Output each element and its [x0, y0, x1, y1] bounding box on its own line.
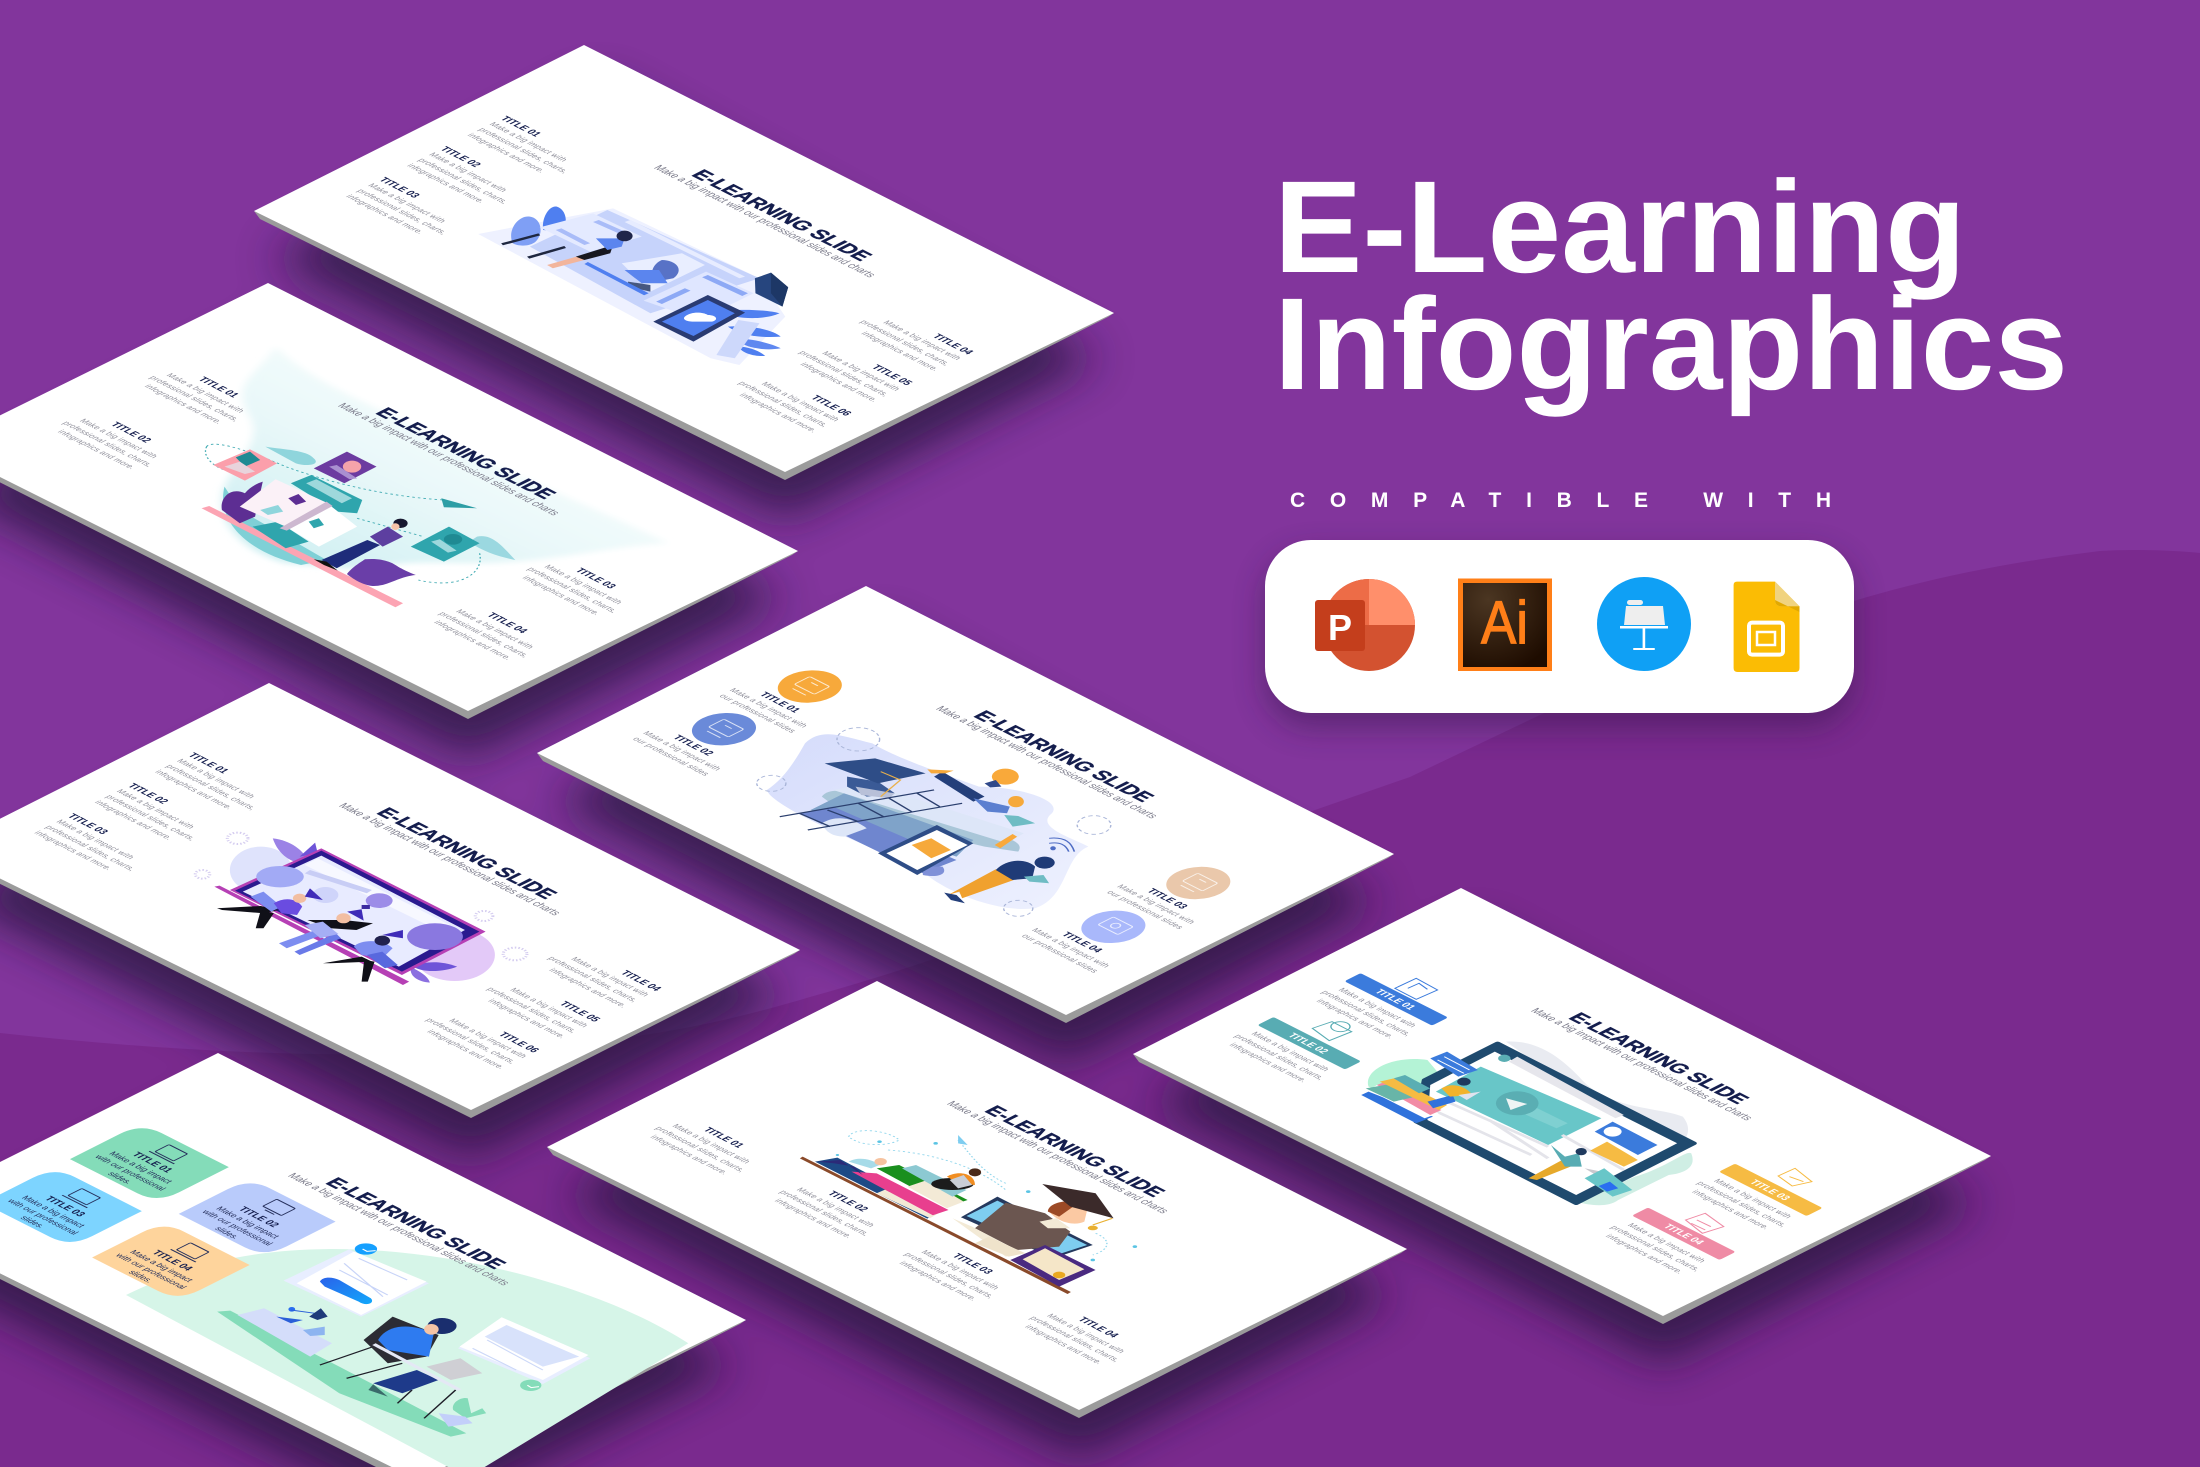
slide 5 text and leaf cards: Make a big impact [214, 1205, 283, 1240]
slide 4 text: TITLE 05 [556, 1000, 602, 1024]
slide 7 text and title bars: E-LEARNING SLIDE [1563, 1010, 1754, 1107]
slide 2 text [48, 330, 707, 664]
slide 2 text: infographics and more. [55, 429, 138, 471]
slide 7 text and title bars: Make a big impact with [1249, 1031, 1332, 1073]
slide 4 text: infographics and more. [425, 1029, 507, 1070]
main title: E-Learning [1274, 153, 1966, 300]
slide 3 text and icon circles: E-LEARNING SLIDE [968, 708, 1159, 805]
slide 6 text: Make a big impact with [670, 1123, 753, 1165]
slide 1 text [344, 91, 1023, 434]
slide 4 text: professional slides, charts, [546, 955, 640, 1003]
slide 7 text and title bars: professional slides, charts, [1608, 1224, 1703, 1272]
slide 2 text: Make a big impact with [454, 608, 536, 650]
slide 1 text: Make a big impact with [366, 182, 448, 224]
slide 7 text and title bars: Make a big impact with our professional slides and charts [1527, 1007, 1756, 1122]
slide 1 text: infographics and more. [405, 163, 487, 204]
slide 3 text and icon circles: Make a big impact with [1030, 927, 1112, 969]
slide 4 text: infographics and more. [32, 830, 115, 872]
slide 5 text and leaf cards: Make a big impact [107, 1150, 176, 1185]
slide 6 text: E-LEARNING SLIDE [979, 1103, 1170, 1200]
illustration: graduate with books and diploma [800, 1131, 1137, 1294]
slide 4 text: Make a big impact with [508, 987, 590, 1029]
slide 5 text and leaf cards: with our professional [92, 1153, 169, 1192]
slide 2 text: professional slides, charts, [437, 611, 531, 659]
slide 7 text and title bars: TITLE 04 [1660, 1223, 1706, 1246]
slide 1 text: TITLE 03 [376, 176, 422, 200]
slide 5 text and leaf cards: slides. [126, 1269, 156, 1284]
slide 1 text: infographics and more. [737, 392, 820, 434]
slide 4 text: TITLE 03 [64, 813, 110, 836]
slide 6 text: professional slides, charts, [1028, 1315, 1122, 1363]
main title: Infographics [1274, 270, 2068, 417]
slide 1: blue e-learning [254, 45, 1114, 480]
slide 5 text and leaf cards: Make a big impact [127, 1249, 196, 1283]
slide 5: green desk worker [0, 1053, 746, 1467]
slide 3 text and icon circles: TITLE 01 [756, 691, 803, 714]
slide 1 text: Make a big impact with [487, 121, 570, 163]
slide 1 text: TITLE 01 [497, 115, 543, 139]
slide 1 text: professional slides, charts, [736, 380, 831, 428]
slide 3 text and icon circles: Make a big impact with [1115, 883, 1198, 925]
slide 3 text and icon circles: TITLE 04 [1058, 931, 1105, 954]
slide 7 text and title bars: infographics and more. [1603, 1233, 1686, 1275]
slide 4 text: TITLE 01 [185, 752, 231, 775]
slide 5 text and leaf cards: slides. [212, 1225, 242, 1240]
slide 1 text: infographics and more. [465, 132, 548, 174]
slide 6 text: TITLE 02 [824, 1190, 871, 1213]
icon: Adobe Illustrator [1458, 578, 1552, 671]
slide 4 text: TITLE 02 [124, 782, 171, 806]
slide 7 text and title bars: TITLE 01 [1371, 988, 1418, 1012]
slide 7 text and title bars: Make a big impact with [1336, 987, 1419, 1029]
slide 4 text: Make a big impact with [569, 956, 652, 998]
slide 5 text and leaf cards: TITLE 03 [41, 1195, 88, 1219]
illustration: students on monitor [195, 833, 527, 985]
slide 4 text: professional slides, charts, [43, 824, 138, 872]
slide 4 text [32, 729, 708, 1071]
slide 1 text: Make a big impact with [427, 151, 510, 193]
slide 4 text: professional slides, charts, [164, 763, 258, 811]
slide 1 text: professional slides, charts, [416, 157, 511, 205]
icon: Keynote [1597, 577, 1691, 671]
slide 4 text: Make a big impact with our professional slides and charts [335, 802, 564, 917]
slide 6 text: TITLE 03 [949, 1252, 995, 1276]
slide 4 text: professional slides, charts, [424, 1017, 518, 1065]
slide 4: virtual classroom [0, 683, 800, 1118]
slide 2 text: Make a big impact with [542, 564, 625, 606]
slide 6 text: Make a big impact with [1045, 1313, 1127, 1355]
slide 1 text: TITLE 04 [929, 333, 976, 356]
slide 7 text and title bars: professional slides, charts, [1232, 1033, 1327, 1081]
slide 6 text [641, 1029, 1314, 1369]
slide 4 text: TITLE 06 [495, 1031, 541, 1054]
slide 3 text and icon circles: TITLE 02 [670, 734, 716, 757]
slide 5 text and leaf cards: with our professional [199, 1208, 276, 1247]
slide 2 text: TITLE 01 [195, 376, 241, 399]
slide 6 text: Make a big impact with [919, 1249, 1002, 1291]
illustration: graduation cap and books [757, 728, 1111, 916]
slide 5 text and leaf cards: E-LEARNING SLIDE [320, 1175, 511, 1272]
slide 6 text: professional slides, charts, [902, 1251, 997, 1299]
slide 1 text: infographics and more. [798, 361, 880, 403]
slide 5 text and leaf cards: Make a big impact [19, 1194, 88, 1229]
slide 4 text: professional slides, charts, [103, 794, 198, 842]
slide 5 text and leaf cards: Make a big impact with our professional slides and charts [284, 1172, 513, 1287]
slide 2 text: infographics and more. [520, 575, 603, 617]
icon: Adobe Illustrator: Ai [1481, 589, 1528, 656]
slide 3 text and icon circles: TITLE 03 [1144, 887, 1190, 911]
slide 3 text and icon circles: our professional slides [1104, 889, 1186, 930]
slide 6 text: infographics and more. [772, 1198, 855, 1239]
slide 3 text and icon circles: Make a big impact with our professional slides and charts [932, 705, 1161, 820]
main title [1274, 153, 2068, 417]
slide 2 text: Make a big impact with [77, 418, 160, 460]
slide 3 text and icon circles: our professional slides [1019, 933, 1100, 974]
slide 5 text and leaf cards [0, 1099, 532, 1376]
slide 2 text: professional slides, charts, [525, 566, 620, 614]
slide 1 text: professional slides, charts, [797, 350, 891, 398]
illustration: student at desk [126, 1243, 688, 1467]
slide 7 text and title bars: infographics and more. [1314, 998, 1397, 1040]
slide 2 text: professional slides, charts, [60, 420, 155, 468]
slide 7 text and title bars: infographics and more. [1690, 1189, 1772, 1231]
slide 6 text: Make a big impact with [794, 1187, 877, 1228]
slide 2 text: professional slides, charts, [147, 375, 242, 423]
slide 3: graduation cap [537, 586, 1394, 1023]
slide 3 text and icon circles: Make a big impact with [727, 687, 810, 729]
slide 3 text and icon circles [630, 633, 1304, 975]
slide 7 text and title bars: infographics and more. [1227, 1042, 1310, 1084]
slide 5 text and leaf cards: TITLE 02 [235, 1206, 281, 1229]
slide 1 text: infographics and more. [344, 193, 426, 235]
slide 6: graduate and books [547, 981, 1407, 1418]
slide 3 text and icon circles: Make a big impact with [641, 730, 723, 772]
slide 3 text and icon circles: our professional slides [630, 736, 712, 777]
icon: PowerPoint: P [1328, 607, 1352, 648]
slide 1 text: Make a big impact with [820, 350, 903, 392]
slide 4 text: infographics and more. [153, 769, 235, 811]
slide 2 text: Make a big impact with [164, 372, 247, 414]
slide 2 text: TITLE 04 [484, 612, 530, 635]
compatible with label: COMPATIBLE WITH [1290, 489, 1831, 512]
slide 5 text and leaf cards: TITLE 04 [149, 1249, 195, 1273]
slide 4 text: infographics and more. [547, 967, 629, 1009]
slide 7 text and title bars: professional slides, charts, [1695, 1180, 1789, 1228]
slide 5 text and leaf cards: slides. [105, 1170, 135, 1185]
slide 7 text and title bars [1220, 935, 1898, 1278]
slide 4 text: Make a big impact with [447, 1018, 529, 1059]
slide 5 text and leaf cards: slides. [18, 1214, 48, 1229]
slide 4 text: TITLE 04 [617, 969, 664, 993]
illustration: tablet with video lesson [1312, 978, 1812, 1233]
slide 3 text and icon circles: our professional slides [717, 693, 798, 734]
slide 2 text: infographics and more. [142, 383, 225, 425]
slide 6 text: infographics and more. [1023, 1324, 1105, 1366]
slide 4 text: professional slides, charts, [485, 986, 579, 1034]
slide 5 text and leaf cards: with our professional [113, 1251, 189, 1290]
slide 7 text and title bars: Make a big impact with [1712, 1178, 1794, 1220]
slide 2: teal book [0, 283, 798, 719]
slide 1 text: Make a big impact with [881, 319, 964, 361]
slide 1 text: infographics and more. [859, 331, 941, 372]
slide 4 text: Make a big impact with [114, 788, 197, 830]
slide 1 text: professional slides, charts, [355, 188, 449, 236]
slide 4 text: infographics and more. [486, 998, 568, 1040]
icon: PowerPoint [1315, 579, 1415, 671]
slide 1 text: professional slides, charts, [476, 127, 571, 175]
slide 1 text: professional slides, charts, [858, 319, 952, 367]
slide 2 text: TITLE 03 [572, 567, 618, 590]
slide 1 text: TITLE 02 [437, 145, 483, 169]
slide 4 text: infographics and more. [92, 799, 175, 841]
slide 7 text and title bars: Make a big impact with [1625, 1222, 1708, 1264]
slide 7 text and title bars: TITLE 03 [1746, 1179, 1793, 1202]
slide 6 text: infographics and more. [648, 1134, 731, 1176]
illustration: open book and student [202, 347, 668, 607]
slide 6 text: Make a big impact with our professional slides and charts [943, 1100, 1172, 1215]
slide 2 text: Make a big impact with our professional slides and charts [334, 402, 563, 517]
slide 1 text: TITLE 05 [868, 364, 915, 387]
compatibility panel [1265, 540, 1854, 727]
slide 7 text and title bars: professional slides, charts, [1319, 989, 1414, 1037]
slide 1 text: Make a big impact with [759, 381, 842, 423]
slide 6 text: professional slides, charts, [777, 1189, 872, 1237]
slide 2 text: E-LEARNING SLIDE [370, 405, 561, 502]
slide 1 text: TITLE 06 [807, 394, 854, 418]
slide 1 text: E-LEARNING SLIDE [686, 167, 877, 264]
slide 7: tablet video [1133, 888, 1991, 1324]
slide 4 text: Make a big impact with [54, 819, 137, 861]
slide 6 text: infographics and more. [897, 1260, 980, 1302]
slide 4 text: Make a big impact with [175, 758, 257, 800]
slide 1 text: Make a big impact with our professional slides and charts [650, 164, 879, 279]
slide 6 text: professional slides, charts, [653, 1125, 748, 1173]
slide 4 text: E-LEARNING SLIDE [371, 805, 562, 902]
slide 6 text: TITLE 01 [700, 1126, 746, 1150]
slide 2 text: infographics and more. [432, 619, 514, 661]
slide 6 text: TITLE 04 [1075, 1316, 1121, 1339]
illustration: blue web page with students [478, 206, 788, 365]
slide 5 text and leaf cards: TITLE 01 [129, 1151, 175, 1174]
icon: Google Slides [1734, 582, 1800, 672]
slide 2 text: TITLE 02 [107, 421, 154, 444]
slide 7 text and title bars: TITLE 02 [1284, 1032, 1331, 1055]
slide 5 text and leaf cards: with our professional [4, 1197, 81, 1236]
